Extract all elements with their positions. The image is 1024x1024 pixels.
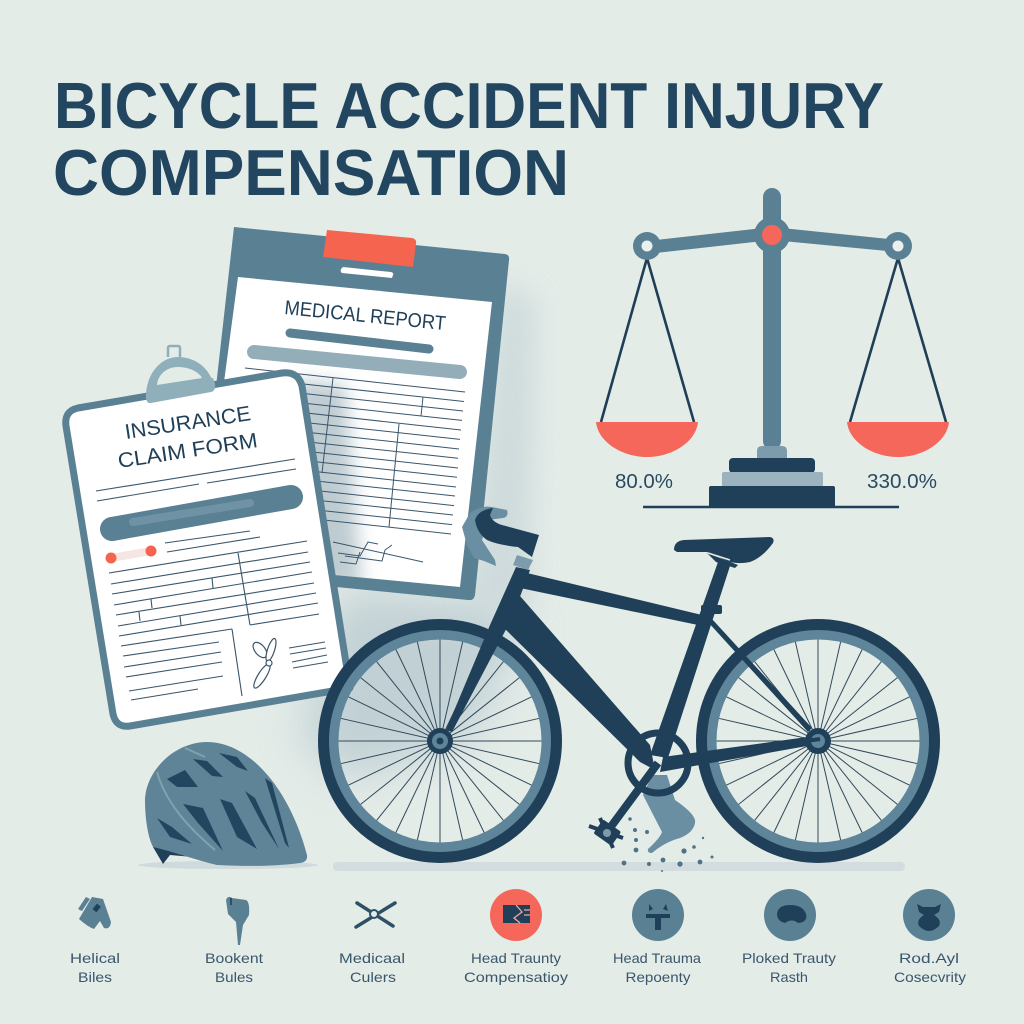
clip base (146, 378, 215, 403)
foot-shaped debris mark (643, 775, 695, 853)
ground shadow (333, 862, 905, 871)
icon labels: Culers (350, 969, 396, 985)
panel: insurance claim form clipboard (66, 346, 350, 726)
icon labels: Biles (78, 969, 112, 985)
scale values: 330.0% (867, 471, 937, 493)
icon: head trauma compensation (490, 889, 542, 941)
icon labels (70, 950, 966, 985)
scale base (643, 446, 899, 508)
icon: picked trauma rash (764, 889, 816, 941)
pole and beam (633, 188, 912, 450)
icon labels: Helical (70, 950, 120, 966)
form heading: CLAIM FORM (116, 429, 259, 473)
icon: head trauma report (632, 889, 684, 941)
icon labels: Medicaal (339, 950, 405, 966)
icon labels: Cosecvrity (894, 969, 966, 985)
form heading: INSURANCE (123, 402, 252, 444)
icon labels: Repoenty (626, 969, 690, 985)
scale values: 80.0% (615, 471, 673, 493)
icon labels: Head Traunty (471, 950, 561, 966)
icon labels: Bookent (205, 950, 263, 966)
icon labels: Ploked Trauty (742, 950, 836, 966)
rear hub (805, 728, 831, 754)
panel: scales of justice (596, 188, 949, 508)
icon labels: Bules (215, 969, 253, 985)
crank and pedal (589, 763, 658, 848)
icon labels: Head Trauma (613, 950, 701, 966)
icon: medical crutches (356, 903, 395, 927)
scale strings (601, 258, 946, 422)
icon: broken bones (226, 897, 249, 945)
title (53, 69, 884, 209)
icon row: categories (70, 889, 966, 985)
icon: medical bills (78, 897, 111, 929)
title: BICYCLE ACCIDENT INJURY (54, 69, 884, 142)
infographic canvas (56, 82, 966, 985)
panel: medical report clipboard: MEDICAL REPORT (284, 297, 447, 335)
saddle (674, 537, 774, 568)
panel: bicycle (324, 507, 934, 872)
left pan (596, 422, 698, 457)
rear wheel (702, 624, 934, 858)
icon: road safety cosecurity (903, 889, 955, 941)
form heading (116, 402, 259, 473)
clip ring (146, 346, 215, 403)
icon: bicycle helmet (138, 742, 318, 869)
form sheet (66, 373, 350, 726)
front wheel (324, 624, 556, 858)
panel: medical report clipboard (195, 227, 509, 600)
checkbox markers (106, 546, 156, 564)
icon labels: Compensatioy (464, 969, 568, 985)
icon labels: Rod.Ayl (899, 950, 959, 966)
form sketch icon (250, 638, 278, 690)
form lines and table (96, 459, 328, 700)
title: COMPENSATION (53, 136, 569, 209)
bicycle frame (446, 562, 812, 772)
handlebar and brake lever (462, 507, 539, 570)
form bar (112, 497, 291, 529)
right pan (847, 422, 949, 457)
scale values (615, 471, 937, 493)
icon labels: Rasth (770, 969, 808, 985)
debris dots (622, 817, 714, 872)
chainring (628, 733, 688, 793)
